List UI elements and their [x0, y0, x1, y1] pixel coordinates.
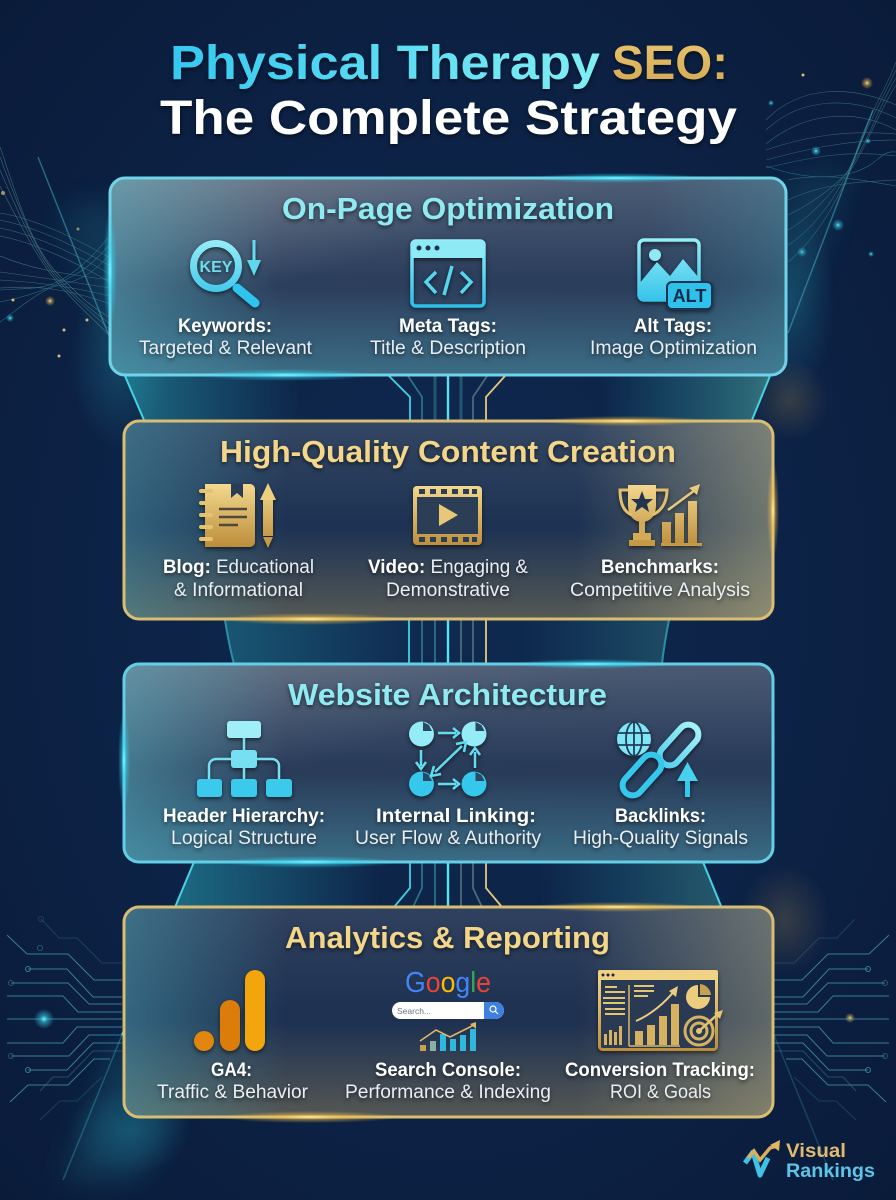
decorative wave lines: top right: [766, 62, 896, 262]
label: search console: Search Console:: [375, 1060, 521, 1081]
label: benchmarks: Benchmarks:: [601, 557, 719, 578]
label: internal linking: User Flow & Authority: [355, 828, 542, 849]
logo wordmark: [786, 1140, 875, 1182]
panel: On-Page Optimization: [103, 173, 786, 381]
icon: Google search console: Search...: [397, 1006, 431, 1016]
label: video: Demonstrative: [386, 580, 510, 601]
icon: code window: [412, 241, 484, 306]
panel 2 background: [124, 416, 779, 625]
circuit lines: lower right: [774, 919, 889, 1120]
icon: video film strip: [413, 486, 482, 545]
label: conversion tracking: Conversion Tracking:: [565, 1060, 755, 1081]
label: search console: [345, 1060, 551, 1103]
icon: conversion dashboard: [598, 970, 723, 1050]
logo: Visual Rankings: [745, 1140, 875, 1182]
label: alt tags: [590, 316, 757, 359]
label: GA4: [157, 1060, 309, 1103]
label: video: Video: Engaging &: [368, 557, 528, 578]
panel 1 background: [103, 173, 786, 381]
label: backlinks: [573, 806, 748, 849]
icon: header hierarchy: [197, 721, 292, 797]
panel: High-Quality Content Creation: [124, 416, 779, 625]
connector: circuit traces between panels 1 and 2: [389, 376, 505, 420]
label: video: [368, 557, 528, 601]
icon: image alt tag: ALT: [673, 286, 706, 306]
label: blog: & Informational: [174, 580, 303, 601]
decorative wave lines: top left: [0, 147, 110, 336]
label: alt tags: Image Optimization: [590, 338, 757, 359]
logo wordmark: Rankings: [786, 1160, 875, 1182]
title: Physical Therapy: [170, 37, 600, 90]
label: internal linking: [355, 806, 542, 849]
icon: keyword magnifier: [194, 240, 261, 303]
label: keywords: Keywords:: [178, 316, 272, 337]
title: The Complete Strategy: [160, 92, 737, 145]
panel 4 background: [124, 902, 773, 1123]
icon: Google search console: [392, 967, 504, 1051]
icon: image alt tag: [639, 240, 712, 309]
circuit node glow: lower left: [34, 1009, 54, 1029]
label: GA4: Traffic & Behavior: [157, 1082, 309, 1103]
panel: Website Architecture: [118, 659, 773, 868]
label: meta tags: Title & Description: [370, 338, 526, 359]
icon: backlinks chain: [617, 720, 702, 800]
circuit lines: lower left: [7, 916, 122, 1120]
title: [160, 37, 737, 145]
label: conversion tracking: ROI & Goals: [610, 1082, 711, 1103]
label: alt tags: Alt Tags:: [634, 316, 712, 337]
label: benchmarks: [570, 557, 750, 601]
heading: On-Page Optimization: [282, 191, 614, 226]
label: search console: Performance & Indexing: [345, 1082, 551, 1103]
title: SEO:: [612, 37, 728, 90]
label: keywords: Targeted & Relevant: [139, 338, 313, 359]
connector: circuit traces between panels 3 and 4: [394, 862, 502, 907]
icon: internal linking: [409, 722, 486, 796]
label: meta tags: Meta Tags:: [399, 316, 497, 337]
icon: blog notebook and pencil: [201, 483, 276, 548]
label: backlinks: Backlinks:: [615, 806, 706, 827]
heading: High-Quality Content Creation: [220, 434, 676, 469]
label: blog: Blog: Educational: [163, 557, 314, 578]
icon: Google search console: Google: [405, 967, 491, 999]
panel 3 background: [118, 659, 773, 868]
label: meta tags: [370, 316, 526, 359]
particles: [1, 74, 874, 1023]
label: keywords: [139, 316, 313, 359]
label: blog: [163, 557, 314, 601]
label: header hierarchy: Header Hierarchy:: [163, 806, 325, 827]
label: header hierarchy: [163, 806, 325, 849]
icon: GA4 bars: [194, 970, 265, 1051]
label: backlinks: High-Quality Signals: [573, 828, 748, 849]
heading: Website Architecture: [288, 677, 607, 712]
connector: circuit traces between panels 2 and 3: [409, 619, 486, 664]
logo mark: [745, 1140, 780, 1175]
label: conversion tracking: [565, 1060, 755, 1103]
heading: Analytics & Reporting: [285, 920, 610, 955]
icon: trophy with rising chart: [620, 484, 702, 546]
label: benchmarks: Competitive Analysis: [570, 580, 750, 601]
label: header hierarchy: Logical Structure: [171, 828, 317, 849]
label: internal linking: Internal Linking:: [376, 806, 536, 827]
logo wordmark: Visual: [786, 1140, 846, 1162]
label: GA4: GA4:: [211, 1060, 252, 1081]
icon: keyword magnifier: KEY: [200, 259, 233, 276]
panel: Analytics & Reporting: [124, 902, 773, 1123]
